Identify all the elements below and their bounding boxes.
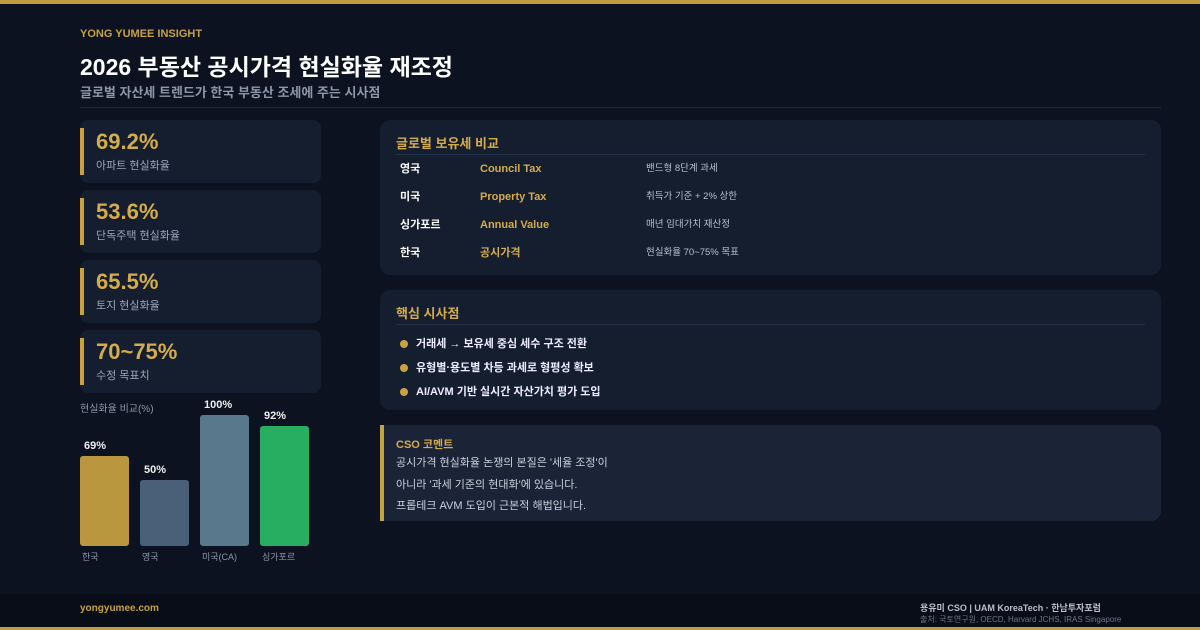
bar chart: 92% — [264, 410, 286, 422]
panel: CSO comment: 프롭테크 AVM 도입이 근본적 해법입니다. — [396, 500, 586, 512]
footer: yongyumee.com — [80, 603, 159, 614]
panel: key implications: 거래세 → 보유세 중심 세수 구조 전환 — [416, 338, 587, 350]
bar chart: 69% — [84, 440, 106, 452]
panel: CSO comment — [380, 425, 1161, 521]
top gold bar — [0, 0, 1200, 4]
panel: key implications: 유형별·용도별 차등 과세로 형평성 확보 — [416, 362, 594, 374]
stat card: detached: 53.6% — [96, 199, 158, 224]
panel: key implications — [380, 290, 1161, 410]
footer: 출처: 국토연구원, OECD, Harvard JCHS, IRAS Singapore — [920, 615, 1121, 624]
panel: global holding tax comparison: 영국 — [400, 163, 420, 175]
bottom gold bar — [0, 627, 1200, 630]
panel: key implications: 핵심 시사점 — [396, 306, 459, 321]
subtitle: 글로벌 자산세 트렌드가 한국 부동산 조세에 주는 시사점 — [80, 85, 380, 100]
panel: global holding tax comparison: Property Tax — [480, 191, 546, 203]
bar chart — [80, 399, 309, 562]
panel: global holding tax comparison — [380, 120, 1161, 275]
stat card: detached: 단독주택 현실화율 — [96, 230, 180, 242]
panel: global holding tax comparison: 밴드형 8단계 과세 — [646, 163, 718, 174]
stat card: land: 65.5% — [96, 269, 158, 294]
stat card: apartment: 69.2% — [96, 129, 158, 154]
panel: global holding tax comparison: 현실화율 70~75% 목표 — [646, 247, 739, 258]
stat card: target: 수정 목표치 — [96, 370, 150, 382]
panel: global holding tax comparison: 싱가포르 — [400, 219, 440, 231]
stat card: detached — [80, 190, 321, 253]
bar chart: 영국 — [142, 552, 159, 562]
panel: global holding tax comparison: 글로벌 보유세 비교 — [396, 136, 499, 151]
bar chart: 현실화율 비교(%) — [80, 404, 154, 415]
panel: global holding tax comparison: Council Tax — [480, 163, 542, 175]
footer: 용유미 CSO | UAM KoreaTech · 한남투자포럼 — [920, 603, 1101, 613]
stat card: target: 70~75% — [96, 339, 177, 364]
bar chart: 싱가포르 — [262, 552, 295, 562]
panel: global holding tax comparison: 미국 — [400, 191, 420, 203]
panel: CSO comment: 아니라 '과세 기준의 현대화'에 있습니다. — [396, 478, 577, 490]
bar chart: 미국(CA) — [202, 552, 237, 562]
stat card: land: 토지 현실화율 — [96, 300, 160, 312]
panel: global holding tax comparison: 취득가 기준 + 2% 상한 — [646, 191, 737, 202]
panel: global holding tax comparison: 공시가격 — [480, 247, 520, 259]
bar chart: 100% — [204, 399, 232, 411]
stat card: apartment: 아파트 현실화율 — [96, 160, 170, 172]
footer — [0, 594, 1200, 627]
bar chart: 50% — [144, 464, 166, 476]
stat card: land — [80, 260, 321, 323]
brand label: YONG YUMEE INSIGHT — [80, 28, 202, 40]
panel: global holding tax comparison: 매년 임대가치 재산정 — [646, 219, 730, 230]
panel: global holding tax comparison: Annual Value — [480, 219, 549, 231]
bar chart: 한국 — [82, 552, 99, 562]
title: 2026 부동산 공시가격 현실화율 재조정 — [80, 54, 453, 80]
panel: CSO comment: CSO 코멘트 — [396, 439, 453, 451]
panel: key implications: AI/AVM 기반 실시간 자산가치 평가 도입 — [416, 386, 601, 398]
stat card: apartment — [80, 120, 321, 183]
panel: CSO comment: 공시가격 현실화율 논쟁의 본질은 '세율 조정'이 — [396, 457, 608, 469]
stat card: target — [80, 330, 321, 393]
panel: global holding tax comparison: 한국 — [400, 247, 420, 259]
